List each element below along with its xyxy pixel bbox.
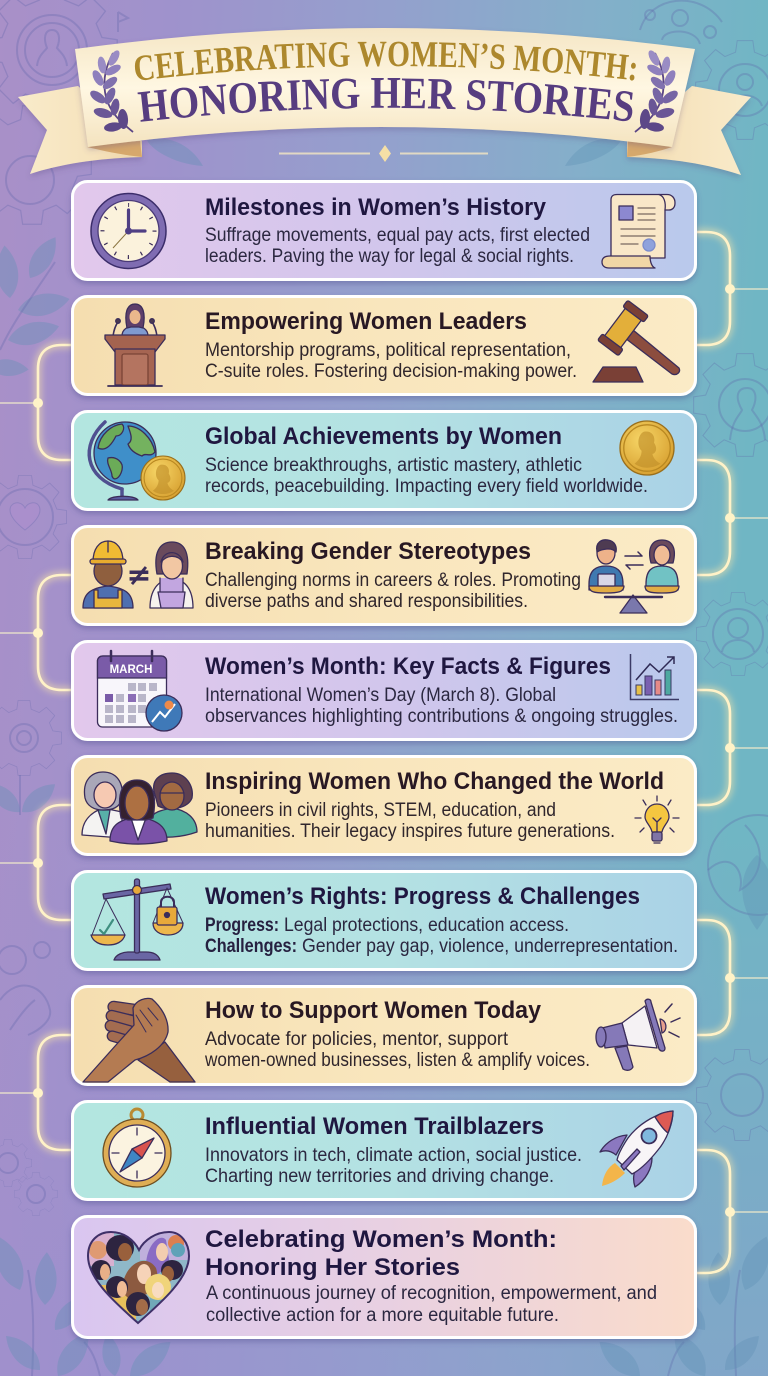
laurel right: [635, 49, 680, 133]
card background: [72, 526, 696, 624]
title: [205, 1226, 557, 1281]
description: Progress:: [205, 915, 279, 936]
panel: key facts: [72, 642, 696, 740]
icon: scales with lock: [91, 879, 183, 960]
panel: milestones: [72, 182, 696, 280]
title: Inspiring Women Who Changed the World: [205, 768, 664, 795]
ribbon main band: [75, 28, 695, 147]
description: [205, 225, 590, 267]
description: [205, 340, 577, 382]
title line 1: CELEBRATING WOMEN’S MONTH:: [134, 42, 636, 81]
title line 2: HONORING HER STORIES: [138, 78, 633, 122]
card background: [72, 412, 696, 510]
ribbon tail right: [627, 86, 751, 175]
description: Innovators in tech, climate action, social justice.: [205, 1145, 582, 1166]
icon: heart of women: [86, 1230, 192, 1326]
description: Charting new territories and driving change.: [205, 1166, 554, 1187]
description: diverse paths and shared responsibilities.: [205, 591, 528, 612]
icon: three women: [82, 772, 197, 844]
glowing connector lines: [0, 232, 768, 1273]
panel: inspiring women: [72, 756, 696, 854]
icon: scroll document: [602, 194, 675, 268]
panel: conclusion: [72, 1216, 696, 1338]
description: Suffrage movements, equal pay acts, first elected: [205, 225, 590, 246]
description: Challenges:: [205, 936, 297, 957]
description: [206, 1283, 657, 1326]
description: [205, 800, 615, 842]
description: women-owned businesses, listen & amplify voices.: [204, 1050, 590, 1071]
title: Influential Women Trailblazers: [205, 1113, 544, 1140]
description: Challenging norms in careers & roles. Promoting: [205, 570, 581, 591]
description: C-suite roles. Fostering decision-making power.: [205, 361, 577, 382]
card background: [72, 642, 696, 740]
description: Gender pay gap, violence, underrepresentation.: [302, 936, 678, 957]
icon: megaphone: [596, 999, 680, 1070]
icon: construction worker: [83, 541, 133, 608]
description: records, peacebuilding. Impacting every field worldwide.: [205, 476, 648, 497]
icon: podium speaker: [105, 304, 165, 386]
description: Science breakthroughs, artistic mastery, athletic: [205, 455, 582, 476]
title: Breaking Gender Stereotypes: [205, 538, 531, 565]
panel: trailblazers: [72, 1102, 696, 1200]
icon: clock: [91, 194, 166, 268]
title: Global Achievements by Women: [205, 423, 562, 450]
icon: lightbulb: [635, 796, 679, 843]
title: Women’s Rights: Progress & Challenges: [205, 883, 640, 910]
description: Legal protections, education access.: [284, 915, 569, 936]
description: collective action for a more equitable future.: [206, 1305, 559, 1326]
icon: March calendar: [98, 651, 182, 731]
card background: [72, 1102, 696, 1200]
title: Women’s Month: Key Facts & Figures: [205, 653, 611, 680]
icon: not equal sign: ≠: [126, 558, 152, 593]
icon: March calendar: MARCH: [110, 664, 152, 676]
card background: [72, 872, 696, 970]
title: Empowering Women Leaders: [205, 308, 527, 335]
description: leaders. Paving the way for legal & social rights.: [205, 246, 574, 267]
description: A continuous journey of recognition, empowerment, and: [206, 1283, 657, 1304]
card background: [72, 1216, 696, 1338]
panel: support: [72, 986, 696, 1084]
description: [205, 1145, 582, 1187]
description: [205, 685, 678, 727]
description: [205, 570, 581, 612]
description: humanities. Their legacy inspires future generations.: [205, 821, 615, 842]
description: Pioneers in civil rights, STEM, education, and: [205, 800, 556, 821]
laurel left: [88, 49, 133, 133]
icon: rocket: [600, 1111, 673, 1187]
panel: rights: [72, 872, 696, 970]
description: observances highlighting contributions & ongoing struggles.: [205, 706, 678, 727]
divider ornament: [279, 145, 488, 162]
icon: growth chart: [630, 654, 679, 700]
panel: leaders: [72, 296, 696, 394]
ribbon tail left: [18, 86, 142, 174]
icon: balanced scale with professionals: [589, 540, 679, 613]
description: Advocate for policies, mentor, support: [205, 1029, 509, 1050]
description: Mentorship programs, political representation,: [205, 340, 571, 361]
title: How to Support Women Today: [205, 997, 541, 1024]
card background: [72, 296, 696, 394]
icon: gold medal: [620, 421, 674, 475]
description: [205, 915, 678, 957]
card background: [72, 756, 696, 854]
panel: global achievements: [72, 412, 696, 510]
card background: [72, 986, 696, 1084]
description: [205, 455, 648, 497]
title: Milestones in Women’s History: [205, 194, 546, 221]
icon: clasped hands: [83, 998, 195, 1082]
description: [204, 1029, 590, 1071]
icon: woman in apron: [150, 542, 193, 608]
title: Honoring Her Stories: [205, 1254, 460, 1281]
title: Celebrating Women’s Month:: [205, 1226, 557, 1253]
description: International Women’s Day (March 8). Global: [205, 685, 556, 706]
icon: globe with medal: [89, 422, 185, 500]
icon: gavel: [593, 300, 680, 382]
title ribbon banner: [18, 28, 751, 210]
icon: compass: [103, 1109, 171, 1187]
panel: stereotypes: [72, 526, 696, 624]
card background: [72, 182, 696, 280]
